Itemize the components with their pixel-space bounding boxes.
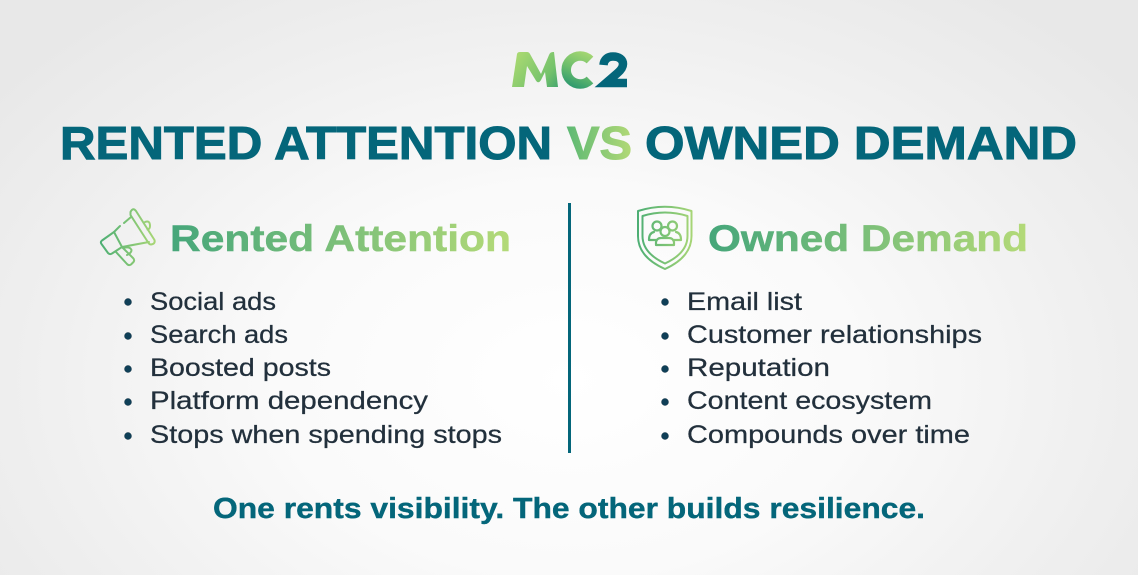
list: owned demand items: Content ecosystem <box>687 387 932 415</box>
list: rented attention items: Stops when spending stops <box>150 421 502 449</box>
list: owned demand items: Customer relationships <box>687 321 982 349</box>
panel: rented attention <box>101 209 511 449</box>
title: RENTED ATTENTION <box>60 117 552 169</box>
tagline: One rents visibility. The other builds resilience. <box>213 493 925 525</box>
list: rented attention items: Boosted posts <box>150 354 331 382</box>
title: VS <box>567 117 632 169</box>
heading: rented attention: Rented Attention <box>170 218 511 259</box>
icon: megaphone <box>101 209 155 265</box>
list: owned demand items <box>661 288 982 449</box>
title <box>60 117 1077 169</box>
logo: MC2 <box>512 52 627 87</box>
title: OWNED DEMAND <box>645 117 1077 169</box>
list: rented attention items: Social ads <box>150 288 276 316</box>
list: rented attention items: Search ads <box>150 321 288 349</box>
list: owned demand items: Email list <box>687 288 802 316</box>
icon: shield with people <box>638 207 692 269</box>
list: owned demand items: Compounds over time <box>687 421 970 449</box>
list: owned demand items: Reputation <box>687 354 830 382</box>
heading: owned demand: Owned Demand <box>708 218 1028 259</box>
list: rented attention items: Platform dependency <box>150 387 429 415</box>
list: rented attention items <box>124 288 502 449</box>
panel: owned demand <box>638 207 1028 449</box>
